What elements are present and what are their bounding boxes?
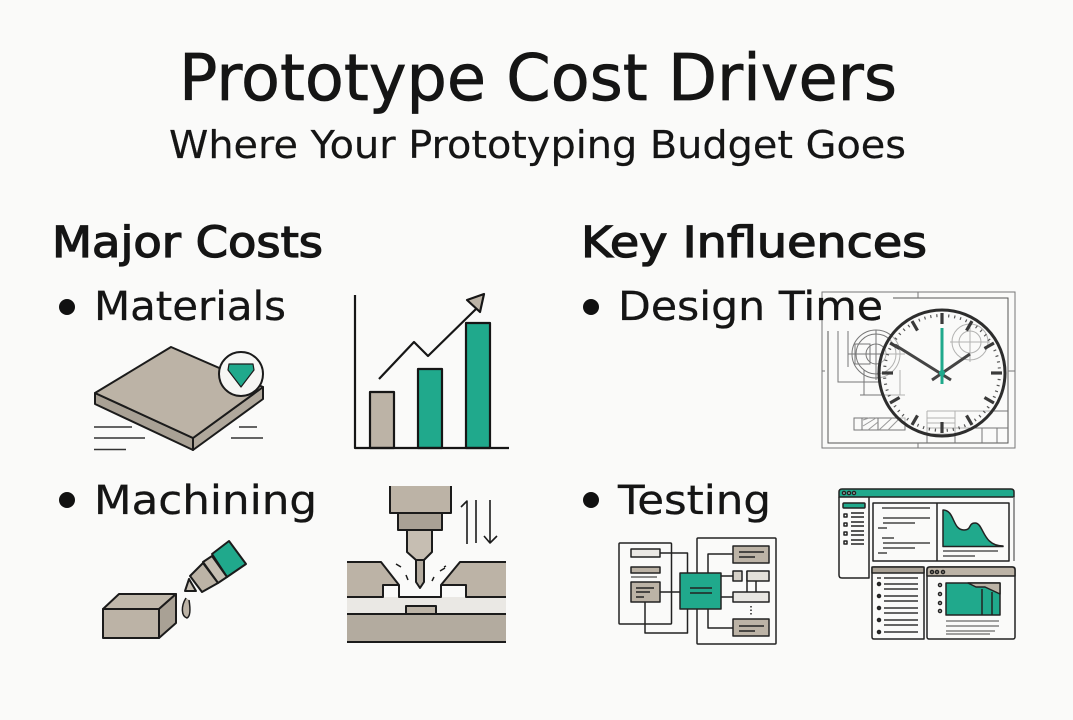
- panel: major costs: [52, 218, 509, 642]
- list item: design time: Design Time: [618, 284, 883, 330]
- subtitle: Where Your Prototyping Budget Goes: [169, 123, 906, 167]
- icon: blueprint with clock: [822, 292, 1015, 448]
- icon: rising bar chart: [355, 294, 509, 448]
- list item: machining: Machining: [94, 478, 317, 524]
- list item: testing: Testing: [617, 478, 771, 524]
- panel: key influences: [581, 218, 1015, 644]
- heading: key influences: Key Influences: [581, 218, 927, 268]
- heading: major costs: Major Costs: [52, 218, 323, 268]
- icon: milling machine: [347, 486, 506, 642]
- icon: block and applicator bottle: [103, 541, 246, 638]
- icon: test flow diagram: [619, 538, 776, 644]
- title: Prototype Cost Drivers: [179, 42, 897, 116]
- icon: software dashboard windows: [839, 489, 1015, 639]
- icon: material sheet with gem badge: [94, 347, 263, 450]
- list item: materials: Materials: [94, 284, 286, 330]
